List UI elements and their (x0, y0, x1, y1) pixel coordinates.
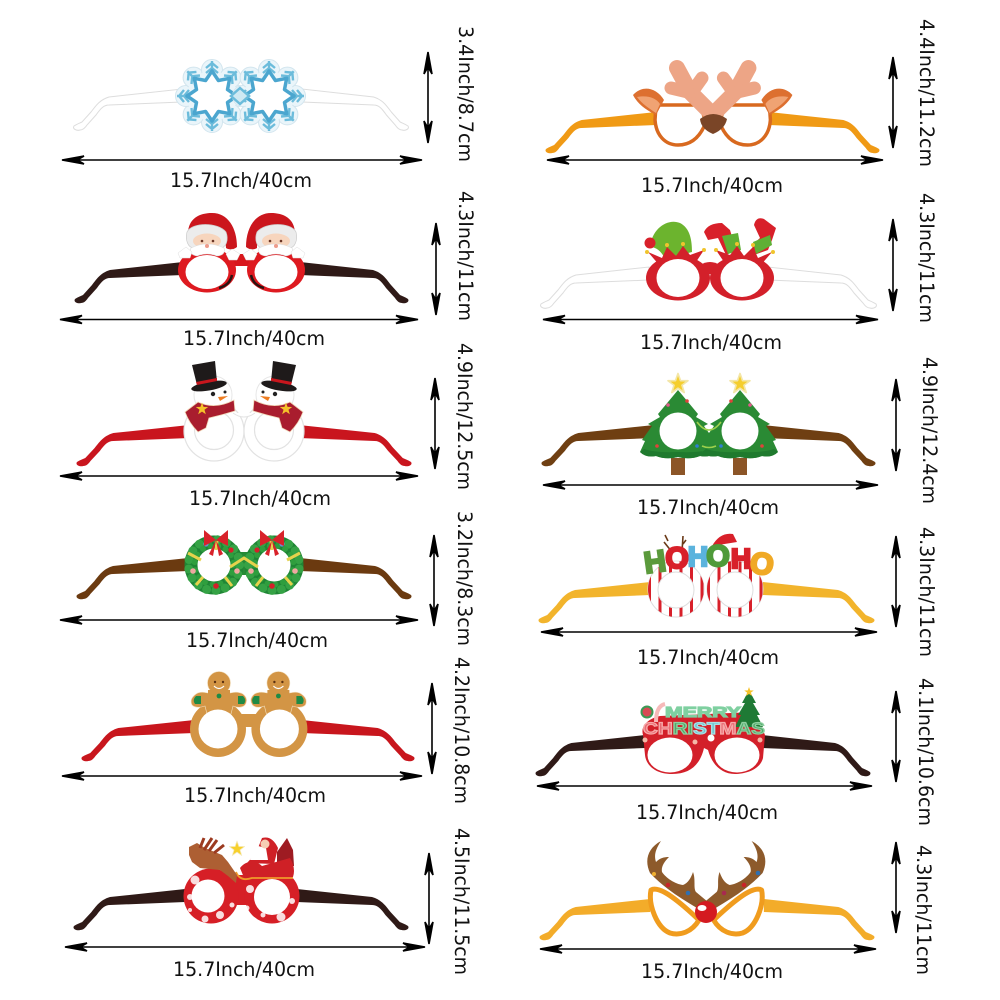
glasses: snowman (76, 361, 412, 466)
width arrow (65, 943, 425, 951)
hohoho lettering: O (665, 542, 689, 575)
hohoho lettering: H (642, 545, 668, 580)
height arrow (432, 223, 440, 315)
glasses: merry christmas (536, 687, 870, 776)
elf boots (704, 223, 736, 255)
panel: antler glasses (540, 841, 935, 983)
panel: elf glasses (541, 193, 938, 354)
hohoho lettering: H (688, 541, 708, 572)
glasses: gingerbread (81, 672, 415, 761)
height arrow (431, 378, 439, 469)
width arrow (60, 616, 418, 624)
panel: gingerbread glasses (62, 657, 473, 807)
width arrow (62, 156, 422, 164)
height arrow (428, 683, 436, 774)
width label: 15.7Inch/40cm (637, 646, 779, 669)
hat and antlers (712, 534, 737, 546)
width label: 15.7Inch/40cm (184, 784, 326, 807)
width arrow (543, 481, 878, 489)
width label: 15.7Inch/40cm (189, 487, 331, 510)
hohoho lettering: O (748, 547, 776, 582)
hohoho lettering: O (706, 540, 730, 573)
panel: wreath glasses (60, 511, 476, 652)
width arrow (540, 945, 876, 953)
glasses: sleigh (73, 837, 409, 930)
height arrow (424, 52, 432, 143)
height label: 4.3Inch/11cm (915, 193, 938, 323)
height arrow (892, 536, 900, 627)
glasses: elf (541, 218, 876, 308)
glasses: merry christmas: CH RIST MAS (643, 719, 765, 738)
height arrow (892, 842, 900, 933)
panel: hohoho glasses (538, 527, 938, 669)
hohoho lettering (642, 540, 776, 582)
width label: 15.7Inch/40cm (641, 174, 783, 197)
height label: 4.3Inch/11cm (915, 527, 938, 657)
height arrow (430, 535, 438, 626)
width arrow (62, 772, 422, 780)
width label: 15.7Inch/40cm (637, 496, 779, 519)
glasses: hohoho (538, 534, 875, 623)
sleigh (229, 837, 294, 880)
panel: sleigh glasses (65, 828, 473, 981)
height label: 4.4Inch/11.2cm (915, 19, 938, 167)
width label: 15.7Inch/40cm (641, 960, 783, 983)
width arrow (541, 628, 877, 636)
width arrow (60, 316, 418, 324)
width arrow (547, 156, 883, 164)
height label: 4.5Inch/11.5cm (450, 828, 473, 975)
small tree (735, 690, 763, 727)
height label: 4.3Inch/11cm (454, 191, 477, 321)
width label: 15.7Inch/40cm (640, 331, 782, 354)
height arrow (892, 691, 900, 782)
panel: merry christmas glasses (536, 678, 937, 826)
height arrow (425, 853, 433, 944)
glasses: reindeer nose (546, 68, 879, 153)
height label: 4.2Inch/10.8cm (450, 657, 473, 804)
height label: 4.9Inch/12.5cm (453, 343, 476, 490)
glasses: wreath (76, 530, 412, 599)
glasses: antler (540, 841, 874, 940)
glasses: christmas tree (541, 374, 876, 475)
panel: santa glasses (60, 191, 477, 350)
height label: 3.4Inch/8.7cm (454, 26, 477, 162)
glasses: santa (75, 213, 408, 303)
width label: 15.7Inch/40cm (636, 801, 778, 824)
merry christmas lettering: MERRY (665, 704, 741, 721)
width label: 15.7Inch/40cm (186, 629, 328, 652)
hohoho lettering: H (731, 543, 751, 574)
height arrow (889, 57, 897, 148)
reindeer (189, 838, 237, 883)
width arrow (60, 472, 418, 480)
glasses: snowflake (74, 60, 408, 132)
panel: reindeer nose glasses (546, 19, 938, 197)
height label: 4.3Inch/11cm (912, 845, 935, 975)
width label: 15.7Inch/40cm (173, 958, 315, 981)
height label: 4.9Inch/12.4cm (918, 357, 941, 504)
panel: snowflake glasses (62, 26, 477, 192)
width label: 15.7Inch/40cm (183, 327, 325, 350)
height label: 3.2Inch/8.3cm (453, 511, 476, 646)
width arrow (537, 782, 872, 790)
height arrow (889, 219, 897, 311)
panel: snowman glasses (60, 343, 476, 510)
panel: christmas tree glasses (541, 357, 941, 519)
width arrow (543, 316, 878, 324)
width label: 15.7Inch/40cm (170, 169, 312, 192)
elf hat (650, 222, 692, 259)
height label: 4.1Inch/10.6cm (914, 678, 937, 826)
height arrow (892, 379, 900, 471)
